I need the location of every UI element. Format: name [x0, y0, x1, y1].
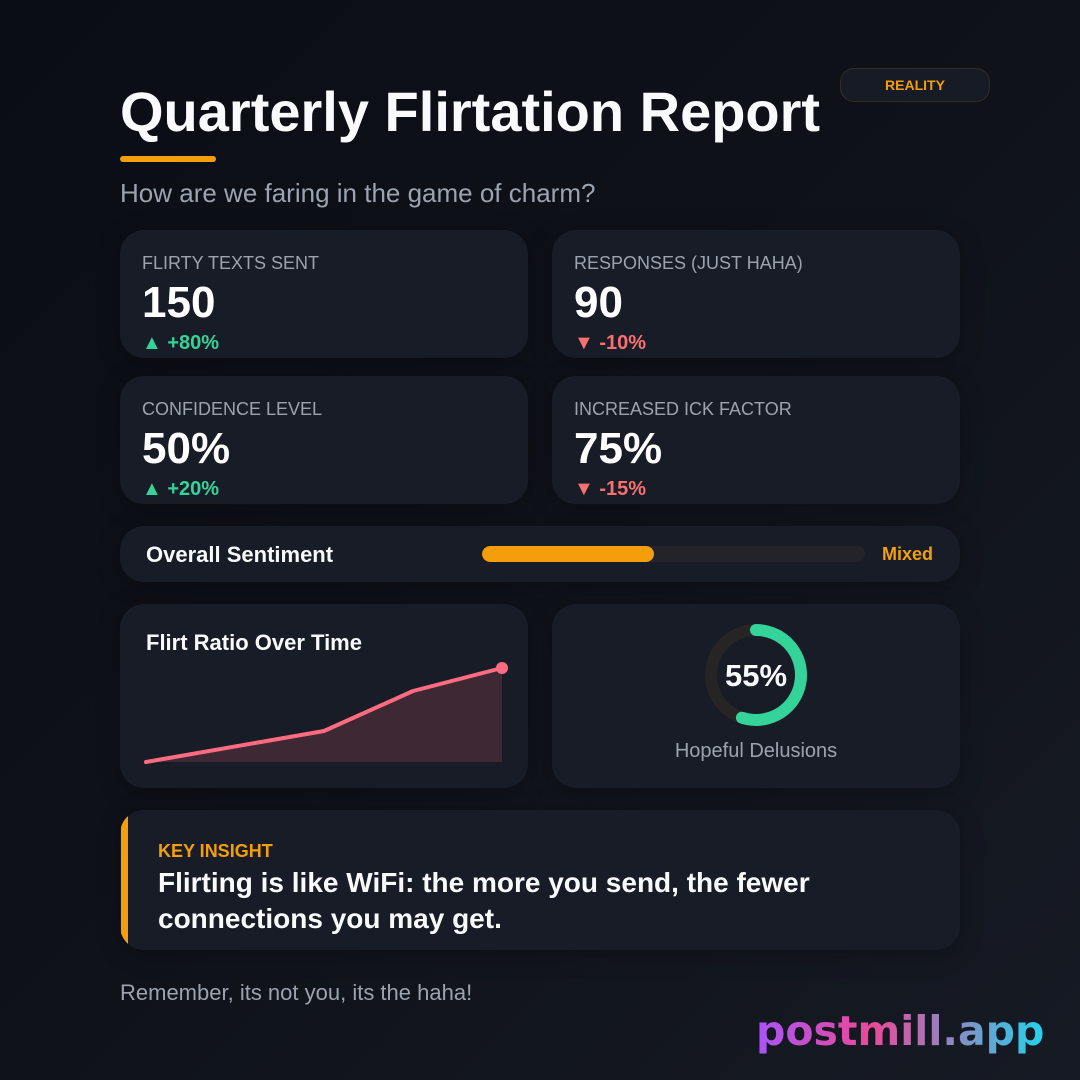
panel: responses: RESPONSES (JUST HAHA) [574, 253, 803, 273]
insight label: KEY INSIGHT [158, 841, 273, 861]
subtitle: How are we faring in the game of charm? [120, 178, 595, 208]
badge: reality: REALITY [885, 77, 945, 93]
footer note: Remember, its not you, its the haha! [120, 980, 472, 1005]
sentiment bar [482, 546, 865, 562]
panel: responses: ▼ -10% [574, 332, 646, 354]
panel: ick factor [552, 376, 960, 504]
panel: overall sentiment [120, 526, 960, 582]
panel: ick factor: INCREASED ICK FACTOR [574, 399, 792, 419]
panel: flirty texts sent: 150 [142, 278, 215, 327]
panel: flirty texts sent: FLIRTY TEXTS SENT [142, 253, 319, 273]
insight text: connections you may get. [158, 903, 502, 934]
badge: reality [840, 68, 990, 102]
panel: ick factor: ▼ -15% [574, 478, 646, 500]
panel: confidence level: ▲ +20% [142, 478, 219, 500]
watermark: postmill.app [756, 1007, 1044, 1055]
insight text [158, 867, 810, 934]
panel: confidence level: 50% [142, 424, 230, 473]
sentiment heading: Overall Sentiment [146, 542, 333, 567]
line chart [144, 662, 508, 764]
panel: responses: 90 [574, 278, 623, 327]
donut caption: Hopeful Delusions [675, 740, 837, 762]
sentiment value: Mixed [882, 544, 933, 564]
title: Quarterly Flirtation Report [120, 80, 820, 143]
panel: confidence level [120, 376, 528, 504]
chart heading: Flirt Ratio Over Time [146, 630, 362, 655]
panel: key insight [120, 810, 960, 950]
accent bar [121, 810, 128, 950]
panel: flirty texts sent [120, 230, 528, 358]
panel: confidence level: CONFIDENCE LEVEL [142, 399, 322, 419]
title underline [120, 156, 216, 162]
panel: donut [552, 604, 960, 788]
donut chart: 55% [725, 658, 787, 693]
insight text: Flirting is like WiFi: the more you send, the fewer [158, 867, 810, 898]
panel: ick factor: 75% [574, 424, 662, 473]
panel: responses [552, 230, 960, 358]
donut chart [705, 624, 807, 726]
panel: flirt ratio chart [120, 604, 528, 788]
panel: flirty texts sent: ▲ +80% [142, 332, 219, 354]
